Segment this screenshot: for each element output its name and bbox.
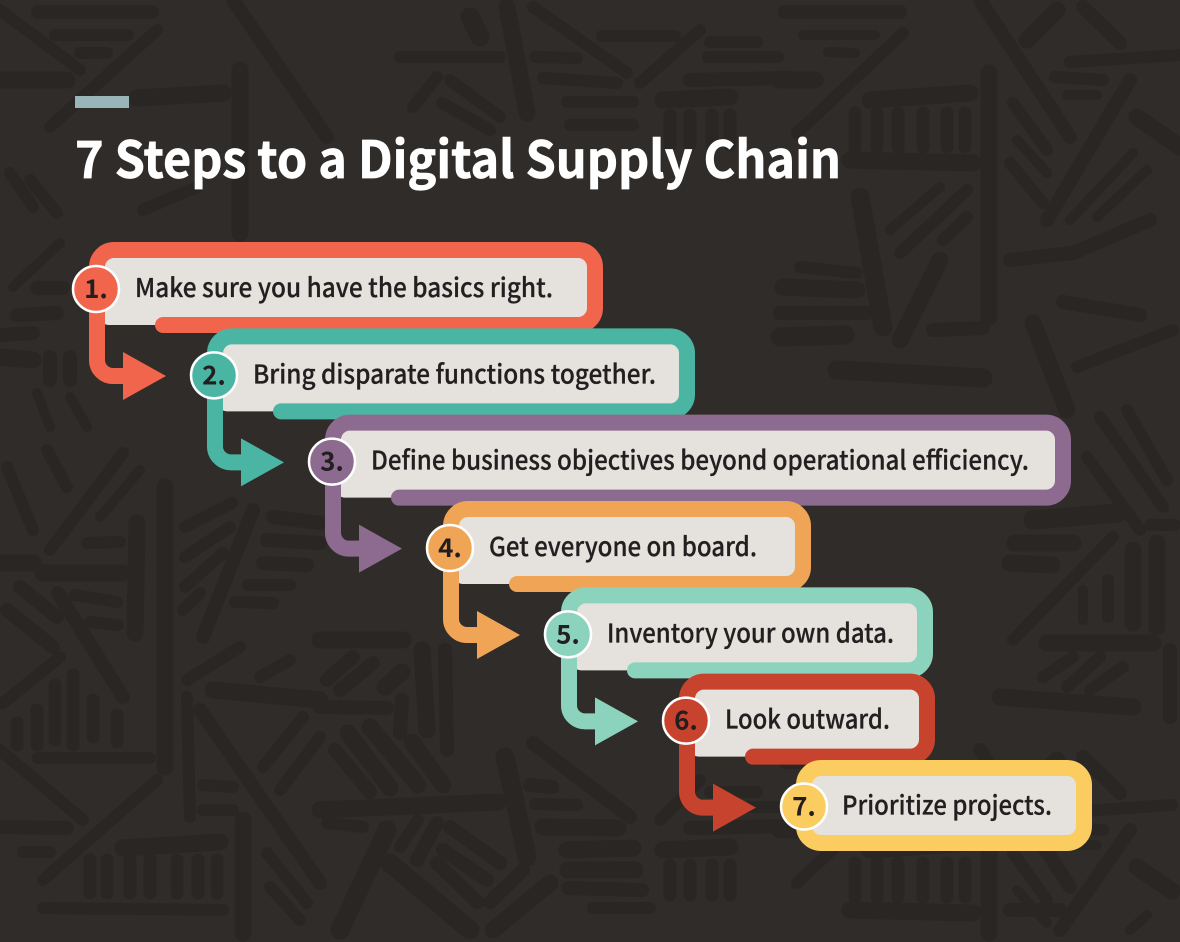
number badge 1 bbox=[73, 266, 119, 312]
title: 7 Steps to a Digital Supply Chain bbox=[75, 119, 841, 193]
text 1: Make sure you have the basics right. bbox=[135, 268, 553, 305]
number badge 5: 5. bbox=[556, 614, 580, 651]
text 2: Bring disparate functions together. bbox=[253, 354, 656, 391]
number badge 2: 2. bbox=[202, 355, 226, 392]
step 3 bbox=[309, 423, 1063, 573]
connector arrow 6 bbox=[687, 682, 927, 832]
number badge 4: 4. bbox=[438, 528, 462, 565]
number badge 3: 3. bbox=[320, 442, 344, 479]
connector arrow 2 bbox=[215, 336, 687, 486]
connector arrow 4 bbox=[451, 509, 803, 659]
number badge 5 bbox=[545, 611, 591, 657]
connector arrow 5 bbox=[569, 595, 925, 745]
step 7 bbox=[781, 768, 1084, 843]
step 5 bbox=[545, 595, 925, 745]
number badge 6: 6. bbox=[674, 701, 698, 738]
accent bar bbox=[75, 96, 129, 108]
text 4: Get everyone on board. bbox=[489, 527, 757, 564]
number badge 3 bbox=[309, 439, 355, 485]
number badge 7 bbox=[781, 784, 827, 830]
number badge 2 bbox=[191, 352, 237, 398]
step 1 bbox=[73, 250, 595, 400]
step 6 bbox=[663, 682, 927, 832]
text 7: Prioritize projects. bbox=[842, 786, 1052, 822]
number badge 7: 7. bbox=[792, 786, 816, 824]
number badge 1: 1. bbox=[84, 269, 108, 306]
text 6: Look outward. bbox=[725, 700, 890, 737]
connector arrow 3 bbox=[333, 423, 1063, 573]
text 3: Define business objectives beyond operational efficiency. bbox=[371, 441, 1029, 478]
number badge 4 bbox=[427, 525, 473, 571]
number badge 6 bbox=[663, 698, 709, 744]
text 5: Inventory your own data. bbox=[607, 613, 894, 650]
step 4 bbox=[427, 509, 803, 659]
connector arrow 1 bbox=[97, 250, 595, 400]
step 2 bbox=[191, 336, 687, 486]
